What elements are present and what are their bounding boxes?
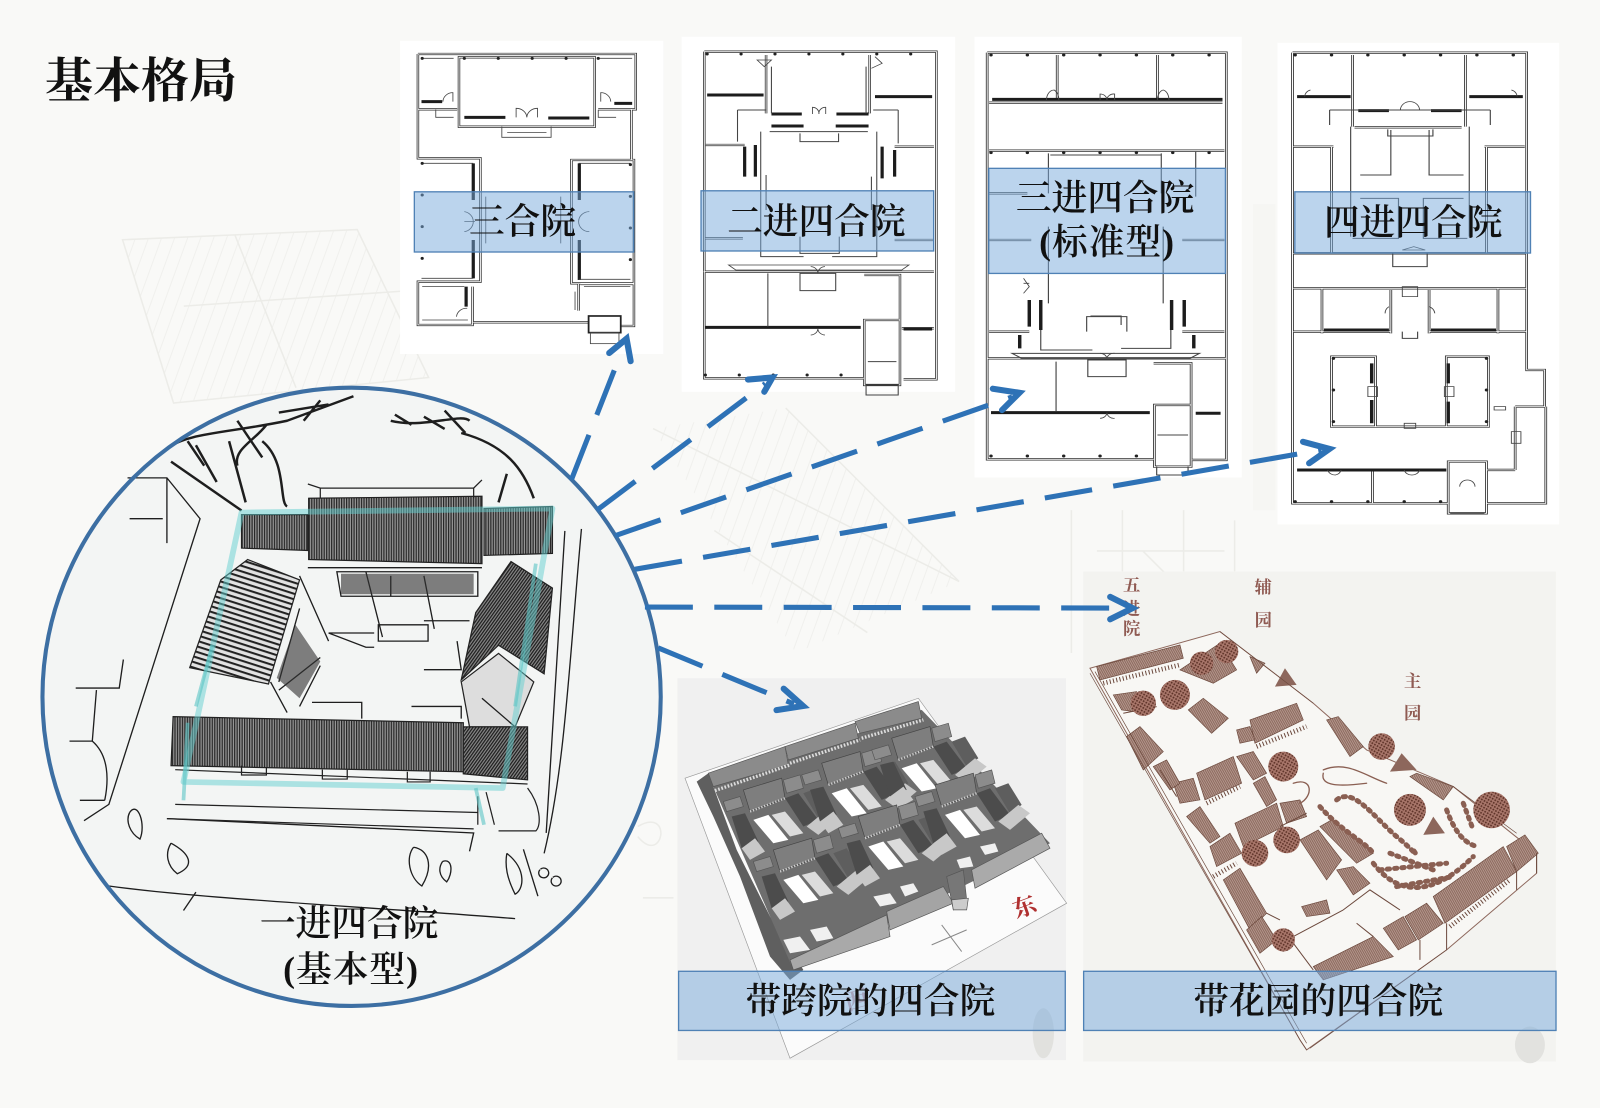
pavilions	[1275, 668, 1445, 835]
red direction character east: 东	[1009, 890, 1042, 924]
garden rockery	[1293, 767, 1477, 887]
floor plan: three-sided courtyard	[418, 54, 636, 344]
courtyard units	[723, 723, 1030, 920]
long back halls	[708, 702, 922, 787]
faint pillar	[1515, 1027, 1545, 1063]
garden labels: 进	[1123, 600, 1141, 619]
banner: with side yards: 带跨院的四合院	[745, 981, 995, 1021]
image: courtyard cluster with side yards	[677, 678, 1067, 1060]
circle label: 一进四合院	[260, 904, 438, 944]
compass	[932, 925, 967, 952]
arrow to four-courtyard plan	[635, 442, 1330, 569]
arrow to garden courtyard	[645, 597, 1133, 619]
banner: three-sided courtyard: 三合院	[469, 202, 576, 242]
courtyard structures	[271, 568, 515, 727]
front wall	[790, 833, 1050, 970]
roofs	[1097, 643, 1538, 980]
small front courts	[783, 843, 998, 953]
garden labels: 五	[1123, 576, 1140, 595]
banner: three-courtyard standard type: 三进四合院	[1016, 178, 1194, 218]
garden labels: 园	[1255, 611, 1272, 630]
floor plan: three-courtyard siheyuan	[987, 53, 1226, 475]
banner: three-courtyard standard type	[989, 168, 1225, 273]
banner: four-courtyard	[1295, 192, 1531, 253]
banner: three-courtyard standard type: (标准型)	[1039, 222, 1175, 262]
shadow side	[697, 773, 803, 980]
garden labels	[1123, 576, 1421, 723]
garden labels: 院	[1123, 620, 1141, 639]
white panels behind plans	[400, 37, 1559, 524]
garden labels: 园	[1404, 704, 1421, 723]
banner: with side yards	[679, 971, 1065, 1030]
arrow to two-courtyard plan	[597, 377, 772, 510]
circle label	[260, 904, 438, 989]
front hall roof	[167, 717, 539, 831]
back hall roof	[242, 480, 552, 564]
banner: two-courtyard	[701, 191, 934, 251]
image: courtyard with garden	[1083, 572, 1556, 1063]
banner: with garden: 带花园的四合院	[1193, 981, 1443, 1021]
arrow to side-yard courtyard	[658, 648, 803, 710]
banner: four-courtyard: 四进四合院	[1324, 203, 1502, 243]
arrow to three-sided courtyard	[571, 339, 631, 480]
circle: basic single-courtyard sketch	[42, 388, 661, 1006]
teal outline of basic courtyard	[183, 508, 552, 825]
title: 基本格局	[45, 55, 237, 108]
faint pillar	[1033, 1008, 1054, 1058]
banner: three-sided courtyard	[414, 192, 634, 252]
building frames	[1090, 632, 1537, 1050]
banner: two-courtyard: 二进四合院	[727, 202, 906, 242]
banner: with garden	[1084, 971, 1556, 1030]
floor plan: two-courtyard siheyuan	[704, 52, 936, 395]
side wing roofs	[190, 560, 552, 727]
faded west character: 西	[842, 985, 872, 1017]
porches	[1103, 665, 1510, 927]
arrow to three-courtyard plan	[615, 389, 1019, 536]
tree branches	[167, 396, 534, 511]
circle label: (基本型)	[283, 949, 419, 989]
shrubs	[128, 809, 561, 896]
floor plan: four-courtyard siheyuan	[1293, 53, 1546, 513]
trees	[1131, 640, 1510, 952]
garden labels: 辅	[1255, 577, 1272, 597]
garden labels: 主	[1404, 672, 1421, 691]
street and ground lines	[69, 478, 581, 919]
